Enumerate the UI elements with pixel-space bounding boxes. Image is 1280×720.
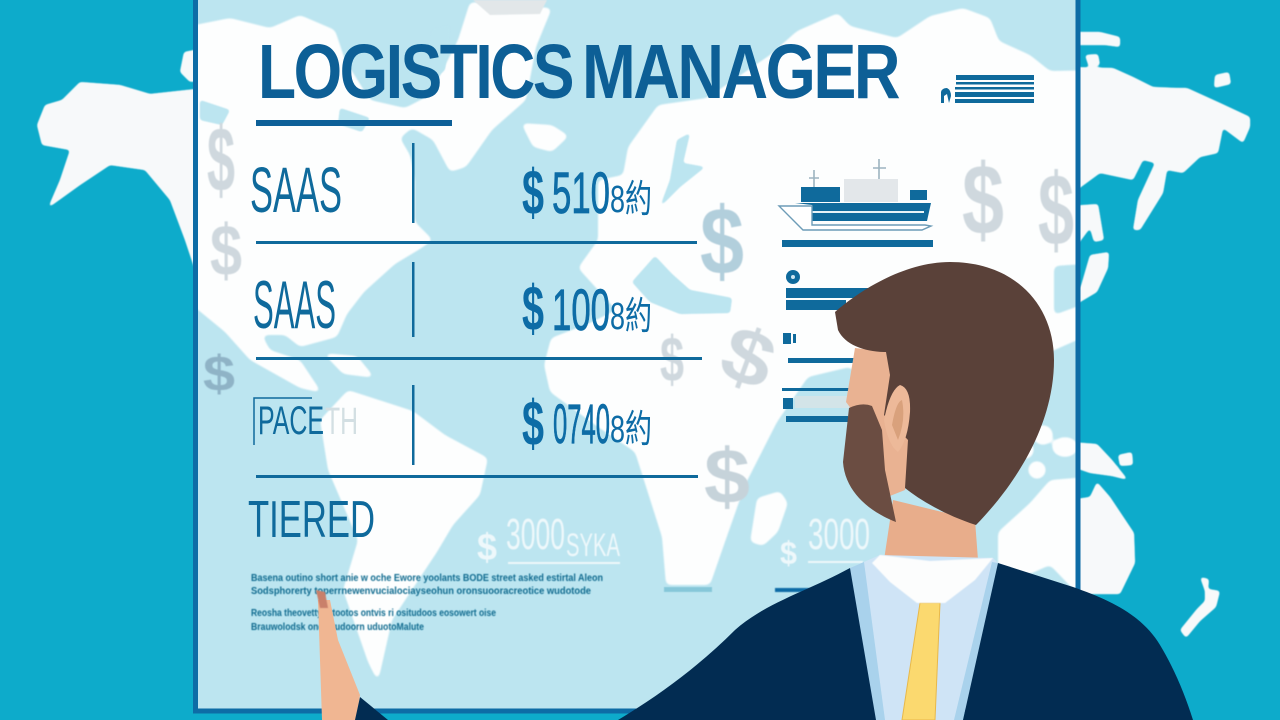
lapel stripes bbox=[850, 562, 885, 720]
body text: Sodsphorerty toperrnewenvucialociayseohun oronsuooracreotice wudotode bbox=[251, 586, 591, 597]
shirt collar bbox=[872, 555, 993, 603]
world map outside panel bbox=[37, 32, 1250, 638]
hair bbox=[835, 262, 1054, 525]
icon: cargo ship bbox=[779, 159, 933, 247]
row: PACE 074: 8約 bbox=[610, 409, 652, 451]
title: LOGISTICS bbox=[258, 29, 573, 115]
row: SAAS 510 bbox=[250, 143, 697, 244]
body text bbox=[251, 573, 603, 633]
inland seas bbox=[199, 62, 732, 315]
background dollar icons: $ bbox=[207, 109, 235, 211]
person bbox=[316, 262, 1193, 720]
row: PACE 074: PACE bbox=[258, 399, 324, 443]
background dollar icons: $ bbox=[962, 144, 1004, 256]
body text: Reosha theovetty vrtootos ontvis ri ositudoos eosowert oise bbox=[251, 608, 496, 619]
row: SAAS 100: 8約 bbox=[610, 296, 652, 338]
row: PACE 074: 0740 bbox=[553, 392, 610, 455]
world map inside panel bbox=[180, 2, 1100, 682]
background dollar icons: $ bbox=[203, 346, 235, 402]
grey shape at top of panel bbox=[473, 0, 547, 15]
body text: Basena outino short anie w oche Ewore yoolants BODE street asked estirtal Aleon bbox=[251, 573, 603, 584]
row: PACE 074 bbox=[254, 385, 698, 478]
face bbox=[846, 348, 915, 500]
background dollar icons: $ bbox=[1038, 153, 1074, 267]
faded white price: 3000 bbox=[506, 510, 565, 559]
background dollar icons: $ bbox=[700, 188, 744, 295]
icon: small stacked bars top right bbox=[941, 75, 1034, 103]
shirt bbox=[850, 555, 998, 720]
row: SAAS 100: 100 bbox=[552, 278, 610, 343]
bars beside the person bbox=[782, 270, 876, 422]
heading: tiered: TIERED bbox=[248, 491, 375, 549]
row: SAAS 510: 8約 bbox=[610, 179, 652, 221]
faded white price: $ bbox=[477, 527, 497, 569]
title bbox=[256, 29, 900, 126]
beard bbox=[843, 404, 896, 522]
background dollar icons: $ bbox=[710, 307, 787, 407]
background dollar icons: $ bbox=[210, 211, 242, 291]
yellow tie bbox=[902, 603, 940, 720]
row: SAAS 100: $ bbox=[522, 272, 544, 344]
row: PACE 074: TH bbox=[325, 401, 358, 443]
main panel bbox=[180, 0, 1193, 720]
faded white price: 3000 bbox=[808, 510, 870, 559]
row: SAAS 510: 510 bbox=[552, 161, 610, 226]
ear bbox=[884, 385, 910, 452]
background dollar icons: $ bbox=[704, 432, 750, 520]
background dollar icons bbox=[203, 109, 1074, 520]
faded white price bbox=[477, 510, 870, 592]
atlas stand bbox=[664, 587, 712, 592]
row: PACE 074: $ bbox=[522, 387, 544, 459]
neck bbox=[884, 500, 978, 560]
pointing arm bbox=[316, 590, 388, 720]
row: SAAS 510: SAAS bbox=[250, 154, 342, 226]
body text: Brauwolodsk ondtutudoorn uduotoMalute bbox=[251, 622, 424, 633]
faded white price: $ bbox=[780, 535, 797, 571]
row: SAAS 100 bbox=[253, 262, 702, 360]
faded white price: SYKA bbox=[566, 527, 620, 563]
row: SAAS 510: $ bbox=[522, 156, 544, 228]
title underline bbox=[256, 120, 452, 126]
title: MANAGER bbox=[582, 29, 900, 115]
background dollar icons: $ bbox=[660, 323, 684, 395]
jacket bbox=[618, 568, 876, 720]
panel border bbox=[196, 0, 1078, 711]
row: SAAS 100: SAAS bbox=[253, 267, 336, 343]
